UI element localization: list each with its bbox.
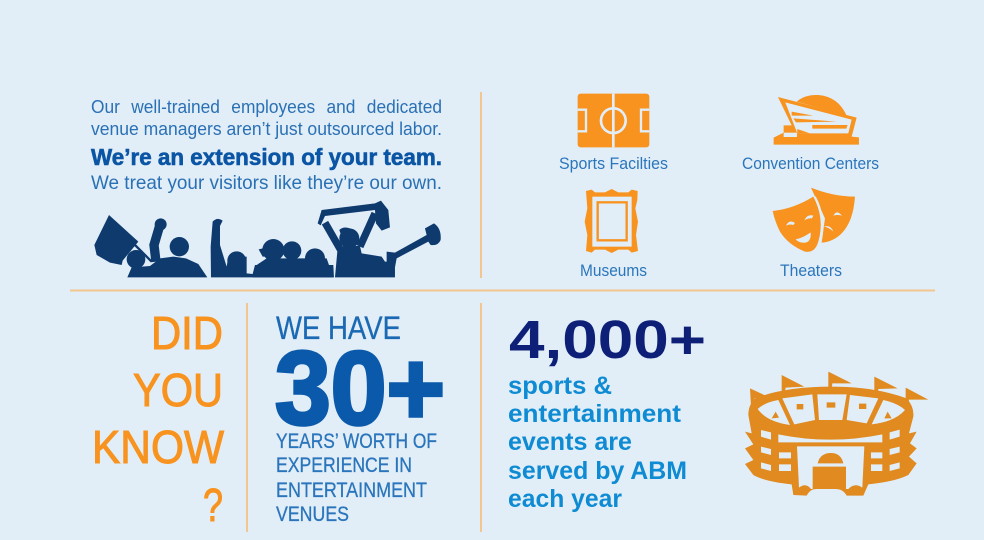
stat: 4,000+ events: served by ABM: [508, 457, 687, 485]
label: sports facilities: Sports Facilties: [559, 154, 668, 173]
stat: 4,000+ events: [508, 310, 706, 513]
icon: convention center: [774, 95, 859, 145]
heading: did you know: DID: [151, 307, 223, 359]
stat: 4,000+ events: sports &: [508, 372, 612, 400]
stat: 30+ years: ENTERTAINMENT: [276, 479, 427, 502]
label: convention centers: Convention Centers: [742, 154, 879, 173]
intro text block: Our well-trained employees and dedicated: [91, 96, 442, 117]
intro text block: [91, 96, 442, 194]
heading: did you know: [92, 307, 225, 531]
icon: stadium: [745, 372, 928, 496]
label: museums: Museums: [580, 261, 647, 280]
big number 30+: 30+: [275, 331, 445, 447]
label: theaters: Theaters: [780, 261, 842, 280]
intro text block: We treat your visitors like they’re our own.: [91, 172, 442, 194]
stat: 4,000+ events: 4,000+: [509, 310, 706, 370]
icon: crowd silhouette: [94, 201, 441, 277]
bold statement: We’re an extension of your team.: [91, 144, 442, 170]
heading: did you know: YOU: [133, 364, 223, 416]
stat: 30+ years: VENUES: [276, 503, 349, 526]
stat: 4,000+ events: entertainment: [508, 400, 682, 428]
icon: theater masks: [773, 188, 855, 252]
stat: 30+ years: EXPERIENCE IN: [276, 454, 412, 477]
icon: sports field: [578, 94, 649, 147]
stat: 30+ years: YEARS’ WORTH OF: [276, 430, 437, 453]
heading: did you know: ?: [203, 479, 223, 531]
stat: 4,000+ events: each year: [508, 485, 622, 513]
intro text block: venue managers aren’t just outsourced labor.: [91, 118, 442, 139]
heading: did you know: KNOW: [92, 421, 225, 473]
stat: 30+ years: WE HAVE: [276, 310, 401, 346]
stat: 30+ years: [275, 310, 445, 526]
icon: museum frame: [585, 189, 638, 253]
stat: 4,000+ events: events are: [508, 428, 632, 456]
